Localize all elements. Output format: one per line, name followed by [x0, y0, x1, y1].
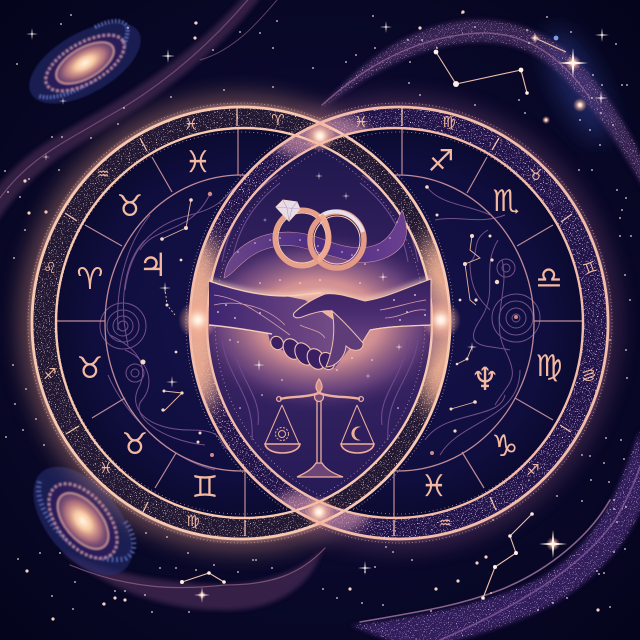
zodiac glyphs: main ring right: ♐︎ [428, 144, 454, 179]
zodiac glyphs: main ring right: ♎︎ [536, 261, 562, 296]
inner circle: right wheel [262, 175, 534, 471]
ring overlap [318, 215, 328, 261]
zodiac glyphs: main ring left: ♉︎ [77, 351, 103, 386]
zodiac glyphs: band left: ♐︎ [43, 365, 57, 383]
constellations inside wheels [140, 185, 518, 457]
inner circle: left wheel [105, 175, 377, 471]
zodiac glyphs: main ring right [421, 144, 562, 504]
base [297, 463, 343, 477]
arm veins [214, 295, 426, 338]
constellations: sky [180, 38, 566, 600]
wheel spokes [57, 128, 583, 518]
moon symbol [351, 427, 361, 440]
zodiac glyphs: band right: ♐︎ [526, 461, 540, 479]
planet glyph: Neptune: ♆︎ [471, 360, 499, 398]
zodiac glyphs: main ring right: ♑︎ [492, 429, 518, 464]
galaxy: bottom left [14, 449, 152, 593]
central lens: background [208, 146, 448, 500]
diamond [276, 200, 300, 221]
finial [316, 379, 322, 393]
right pan [341, 405, 374, 453]
beam [280, 393, 360, 399]
wedding band [310, 212, 364, 268]
lens stars [230, 172, 403, 408]
zodiac glyphs: main ring left: ♈︎ [77, 262, 103, 297]
zodiac glyphs: main ring right: ♏︎ [493, 184, 519, 219]
arm outline [209, 281, 322, 334]
fingers [268, 334, 338, 373]
ring glow [32, 107, 608, 539]
zodiac glyphs: band left: ♓︎ [99, 459, 113, 477]
planet glyph: Jupiter: ♃︎ [139, 246, 167, 284]
zodiac glyphs: band right: ♍︎ [442, 113, 456, 131]
zodiac glyphs: main ring left: ♉︎ [122, 427, 148, 462]
zodiac glyphs: band right: ♉︎ [529, 166, 543, 184]
left wheel: flowing lines [100, 185, 240, 470]
sun symbol [276, 428, 288, 440]
zodiac glyphs: band right: ♓︎ [354, 113, 368, 131]
zodiac glyphs: main ring left [77, 145, 218, 505]
right wheel disc [207, 128, 583, 518]
zodiac glyphs: band left: ♌︎ [43, 259, 57, 277]
right wheel: flowing lines [425, 187, 540, 455]
ring band: left wheel [30, 105, 469, 541]
zodiac glyphs: band right [354, 113, 600, 532]
ribbon behind rings [224, 210, 406, 278]
right arm and hand [293, 279, 431, 343]
wedding rings [275, 200, 364, 268]
band tick marks [65, 108, 572, 536]
ring band: right wheel [170, 105, 610, 541]
balance scales [265, 379, 374, 477]
zodiac glyphs: band left: ♓︎ [184, 115, 198, 133]
zodiac glyphs: band right: ♍︎ [578, 366, 600, 384]
zodiac glyphs: main ring right: ♍︎ [536, 349, 562, 384]
left arm and hand [209, 281, 352, 368]
zodiac glyphs: main ring left: ♓︎ [185, 145, 211, 180]
zodiac glyphs: main ring left: ♊︎ [192, 470, 218, 505]
nebula: blue cloud top right [535, 22, 621, 148]
left pan [265, 405, 300, 453]
engagement ring [275, 210, 329, 266]
zodiac glyphs: band left: ♍︎ [186, 512, 200, 530]
handshake [209, 279, 431, 373]
zodiac glyphs: band right: ♊︎ [581, 257, 599, 279]
left wheel disc [56, 128, 432, 518]
zodiac glyphs: main ring right: ♓︎ [421, 469, 447, 504]
arm sparkles [218, 295, 425, 320]
ring outlines [32, 107, 608, 539]
zodiac glyphs: band right: ♒︎ [438, 514, 452, 532]
dotted ring rims [28, 103, 612, 543]
zodiac glyphs: main ring left: ♉︎ [117, 189, 143, 224]
zodiac glyphs: band left: ♒︎ [96, 165, 110, 183]
post [317, 400, 321, 463]
zodiac glyphs: band left [43, 111, 285, 530]
galaxy: top left [16, 6, 154, 120]
lower palm [326, 311, 363, 367]
top edge glow [209, 279, 431, 300]
intersection flares [178, 120, 461, 528]
zodiac glyphs: band left: ♈︎ [271, 111, 285, 129]
